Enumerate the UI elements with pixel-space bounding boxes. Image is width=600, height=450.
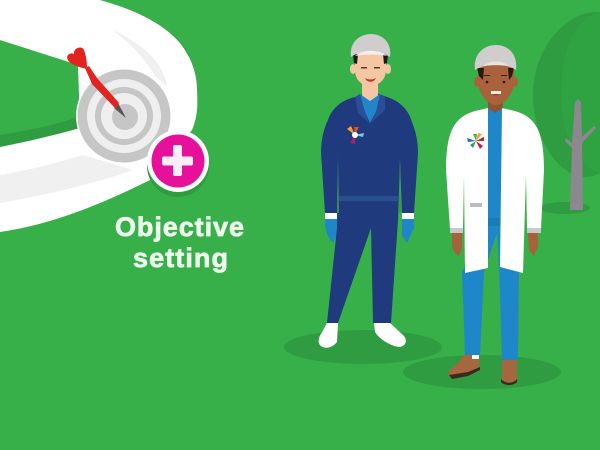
figure: man in navy overalls <box>319 34 418 348</box>
cuffs <box>325 213 414 219</box>
ground shadows <box>284 330 561 389</box>
heading: Objective setting: Objective <box>115 212 244 242</box>
lab coat <box>446 108 488 273</box>
icon: plus button <box>147 130 209 197</box>
shoes <box>448 355 517 384</box>
heading: Objective setting: setting <box>133 243 228 273</box>
ribbon path with target <box>0 0 197 232</box>
logo <box>467 133 484 149</box>
shoes <box>319 323 406 348</box>
head <box>355 50 386 86</box>
hairnet <box>351 34 390 57</box>
hands <box>452 233 538 256</box>
target <box>76 68 172 164</box>
scrub top <box>487 108 502 218</box>
figure: man in white lab coat <box>446 45 544 385</box>
head <box>488 98 503 113</box>
hairnet <box>475 45 516 70</box>
tree <box>533 12 600 214</box>
neck and shirt <box>362 80 378 102</box>
heading: Objective setting <box>115 212 244 273</box>
gloves <box>325 219 414 243</box>
overalls <box>321 94 418 323</box>
trousers <box>462 215 519 360</box>
icon: dart <box>67 47 126 118</box>
logo <box>347 126 364 144</box>
